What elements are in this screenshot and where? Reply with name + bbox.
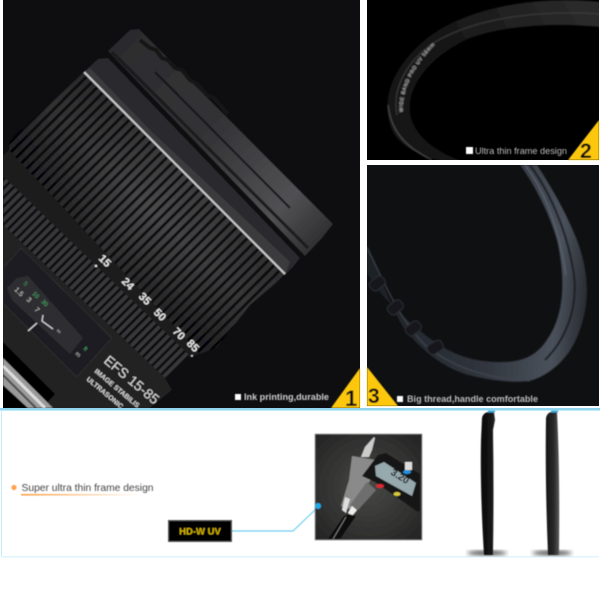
panel 1: lens	[3, 0, 360, 411]
distance window: 30	[40, 299, 49, 309]
distance window: 7	[33, 306, 40, 314]
caliper photo: 3.20	[388, 467, 411, 487]
badge 2	[568, 120, 599, 163]
thread knobs	[368, 274, 445, 356]
badge 2: 2	[580, 140, 592, 163]
badge 3	[367, 367, 398, 408]
connector line	[231, 507, 318, 531]
focal length scale: 15	[96, 253, 113, 270]
distance window: ∞	[55, 328, 62, 335]
ring side view 1	[467, 410, 507, 555]
badge 1: 1	[345, 386, 357, 411]
distance window	[3, 267, 88, 358]
badge 1	[331, 368, 360, 411]
focal length scale: 50	[151, 307, 168, 324]
lens model text: EFS 15-85	[101, 352, 163, 407]
lens collar	[84, 58, 300, 275]
lens front ring	[108, 29, 333, 256]
feature text: Super ultra thin frame design	[22, 483, 154, 494]
distance window: m	[74, 351, 81, 359]
badge 3: 3	[368, 385, 380, 408]
caption 2: Ultra thin frame design	[475, 145, 567, 156]
distance window: 5	[22, 281, 29, 288]
focal length scale: 24	[119, 276, 137, 293]
focal length scale: 85	[184, 338, 201, 355]
silver highlight	[84, 72, 285, 274]
ribbed zoom ring	[9, 72, 285, 354]
filter ring with thread	[367, 165, 587, 382]
distance window: ft	[82, 346, 88, 353]
distance window: 3	[25, 296, 32, 304]
lens body	[3, 225, 172, 408]
distance window: 1.5	[13, 286, 24, 298]
second ribbed ring	[3, 176, 189, 378]
distance window: 10	[31, 291, 40, 301]
chrome mount	[3, 358, 53, 408]
panel 4: thin frame comparison	[0, 408, 600, 558]
filter ring top view	[387, 0, 600, 164]
product label	[168, 520, 232, 542]
lens model text: IMAGE STABILIS	[93, 368, 141, 410]
focal length scale: 35	[136, 291, 153, 308]
lens model text: ULTRASONIC	[85, 376, 124, 411]
caption 1: Ink printing,durable	[244, 392, 329, 402]
caption 3: Big thread,handle comfortable	[407, 394, 538, 404]
ring lettering: WIDE BAND PRO UV 58mm	[398, 42, 436, 114]
ring side view 2	[532, 410, 572, 555]
panel 2: ultra thin ring	[367, 0, 600, 163]
focal length scale	[95, 253, 201, 357]
dark band with focal marks	[3, 150, 200, 357]
focal length scale: 70	[170, 326, 187, 343]
panel 3: big thread ring	[367, 165, 599, 408]
caliper photo	[315, 434, 422, 540]
product label: HD-W UV	[179, 526, 221, 538]
